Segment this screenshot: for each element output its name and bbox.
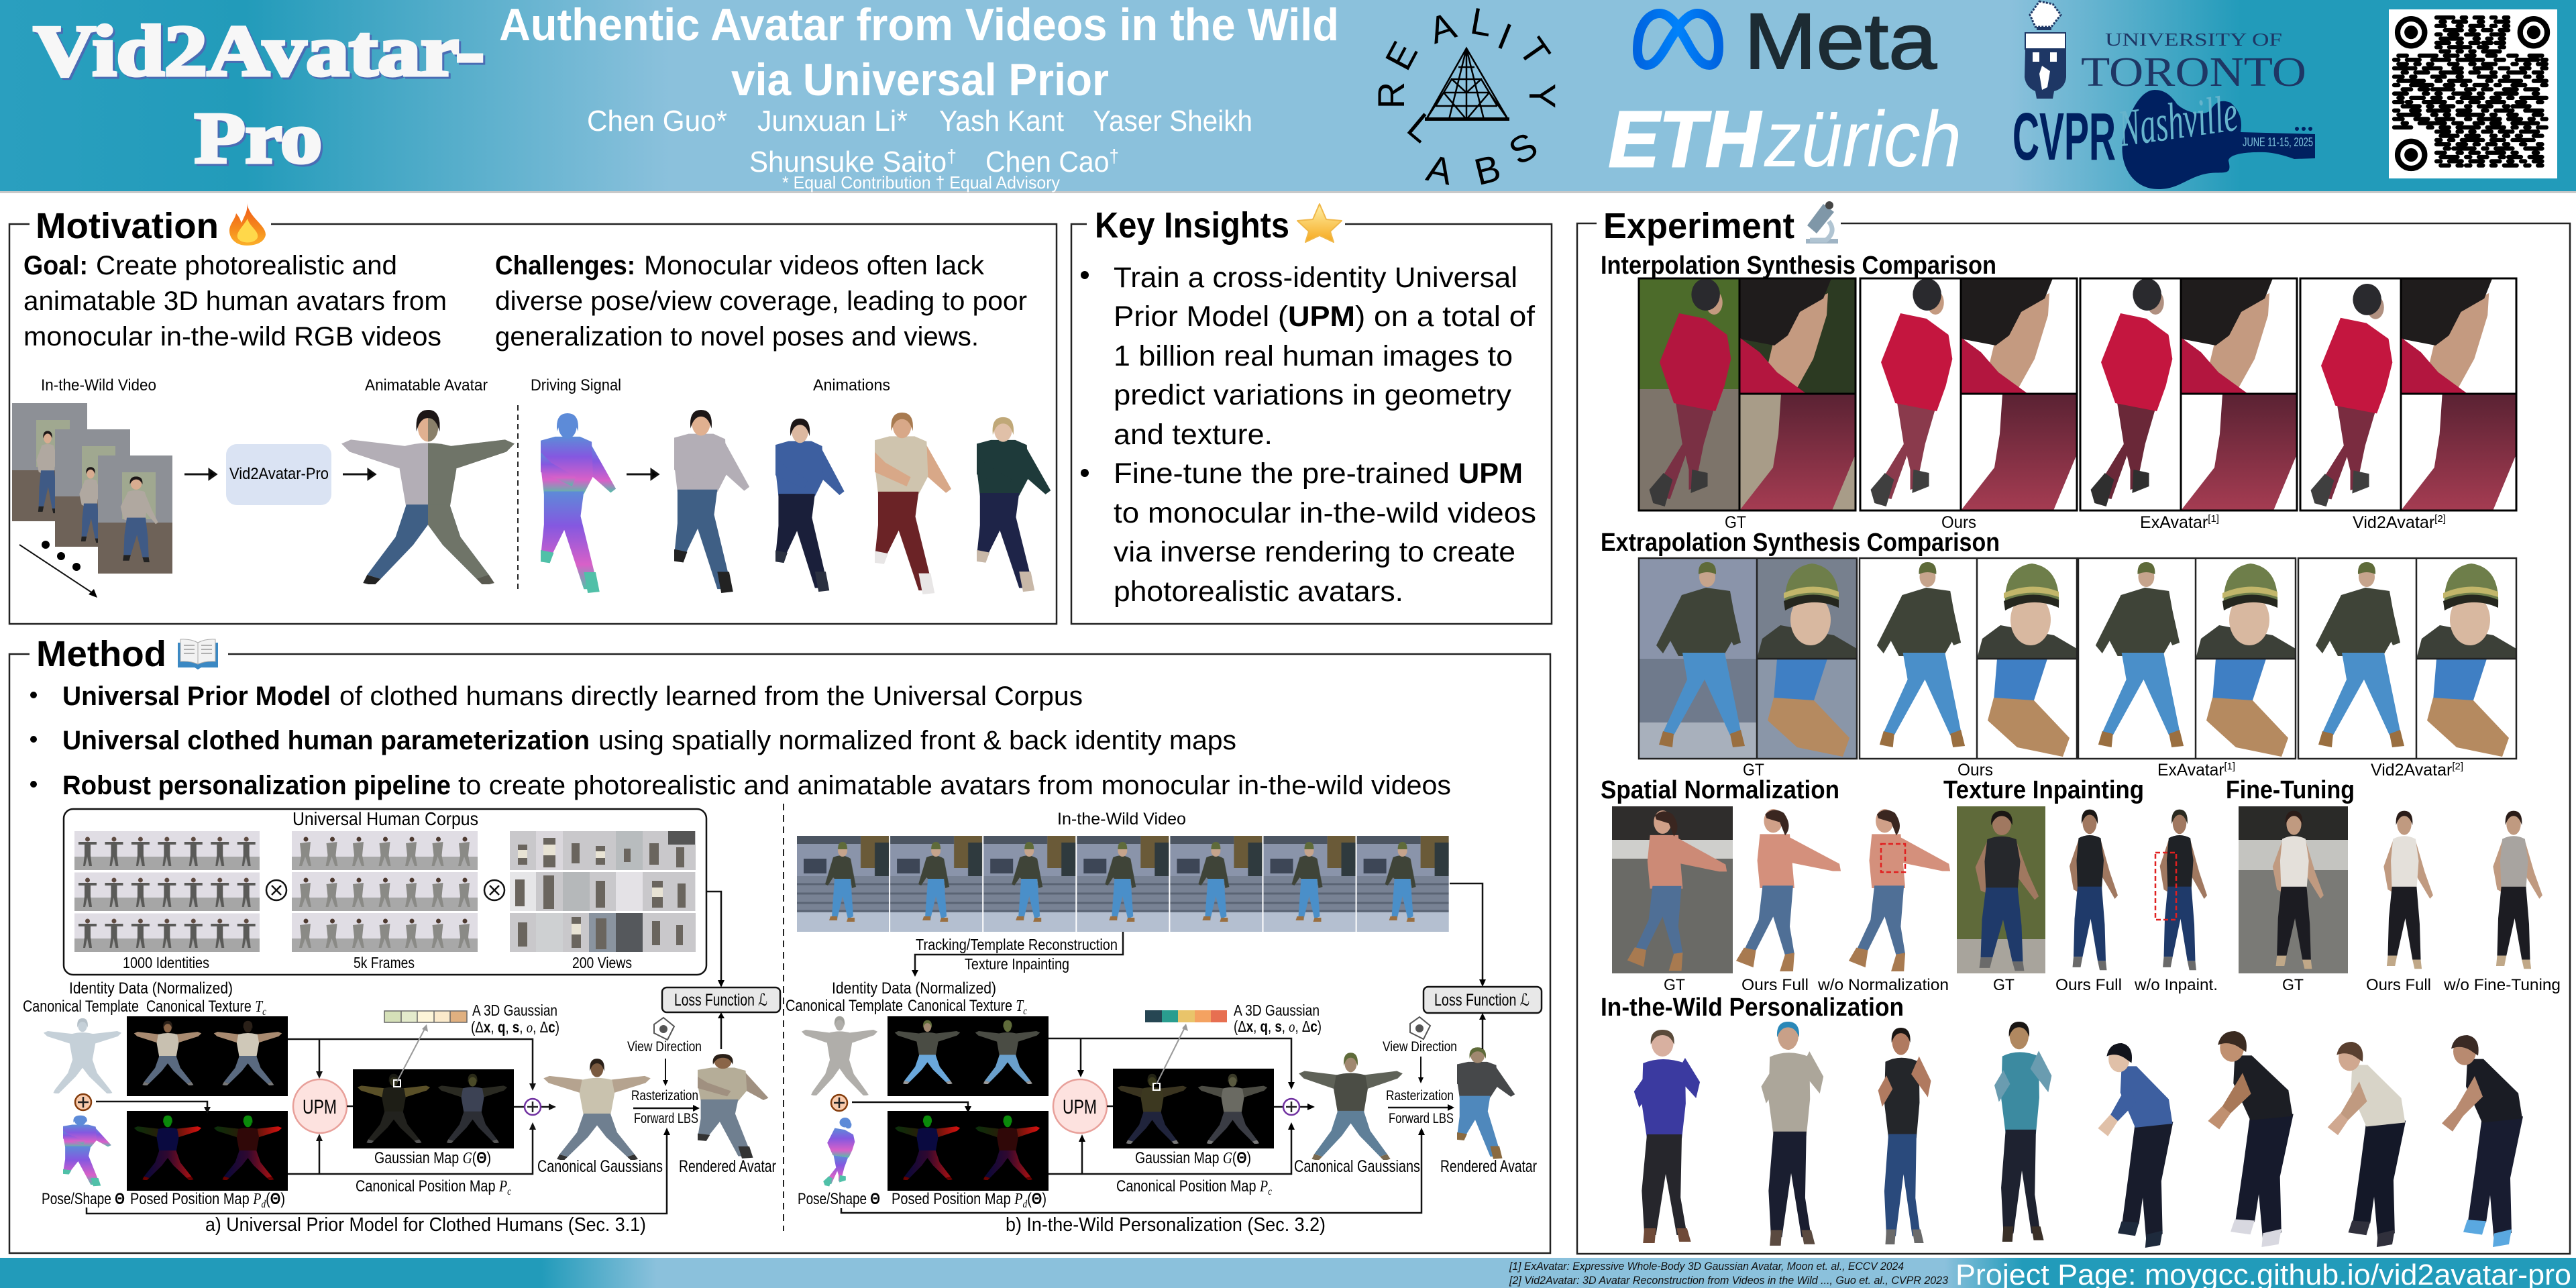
single gaussian attribute bar [384,1002,559,1081]
rendered avatar figure [697,1054,768,1159]
identity data labels: Canonical Template [23,998,139,1016]
logo: Reality Labs [1370,0,1564,193]
extrapolation labels: Vid2Avatar [2371,761,2452,780]
logo: Reality Labs: L [1468,0,1495,45]
logo: Reality Labs: E [1377,35,1426,76]
tracking connector [912,932,1123,977]
UPM node [293,1079,347,1133]
diagram labels [42,1149,776,1210]
extrapolation comparison: Vid2Avatar [2298,558,2516,759]
rendered to loss arrow [1482,1018,1483,1049]
project name: Pro [197,101,324,180]
identity data labels: Canonical Texture T [908,997,1036,1015]
interpolation labels: Vid2Avatar [2353,513,2434,532]
identity data labels: c [262,1006,266,1018]
interpolation comparison: Vid2Avatar [2300,278,2516,511]
logo: Reality Labs: T [1511,30,1559,73]
logo: Reality Labs: B [1470,146,1505,193]
heading: Experiment: Experiment [1603,206,1794,246]
heading: Motivation: Motivation [36,206,219,246]
logo: Reality Labs: R [1370,82,1412,109]
panel: Key Insights [1071,201,1552,624]
rasterization arrow: Forward LBS [1389,1111,1454,1126]
logo: University of Toronto: TORONTO [2081,50,2306,95]
ablation labels: Ours Full [1741,976,1809,994]
subheadings: ablation [1601,776,2355,804]
canonical gaussians figure [1299,1053,1403,1161]
extrapolation labels: Ours [1957,761,1993,780]
captions: Animations [813,376,890,394]
subheading: extrapolation: Extrapolation Synthesis Comparison [1601,529,2000,557]
logo: Reality Labs: A [1424,4,1461,52]
captions [41,376,890,394]
ablation labels: GT [1993,976,2015,994]
logo: CVPR Nashville [2012,83,2315,189]
ablation labels: Ours Full [2366,976,2431,994]
interpolation comparison: ExAvatar [2080,278,2297,511]
tracking connector: Texture Inpainting [965,955,1069,973]
identity data labels [786,979,1027,1017]
box: Vid2Avatar-Pro [226,444,331,505]
animatable avatar figure [341,410,515,586]
subheading: interpolation: Interpolation Synthesis Comparison [1601,252,1996,280]
logo: Reality Labs: L [1399,105,1443,150]
text: challenges: Monocular videos often lack [644,251,985,280]
text: challenges: diverse pose/view coverage, leading to poor [495,286,1027,316]
add icon: orange [831,1095,847,1111]
ablation labels: Ours Full [2055,976,2122,994]
authors: Yash Kant [939,105,1064,138]
icon: open book [178,639,218,669]
bullet list: photorealistic avatars. [1114,576,1403,608]
text: challenges: Challenges: [495,251,635,280]
subheadings: ablation: Texture Inpainting [1943,776,2144,804]
bullet list [1081,262,1536,608]
panel: Method [9,634,1550,1253]
text: challenges [495,251,1027,352]
view direction: View Direction [627,1039,702,1055]
authors: Shunsuke Saito [749,146,956,178]
rasterization arrow: Forward LBS [634,1111,698,1126]
footer banner [0,1258,2576,1288]
single gaussian attribute bar: (Δx, q, s, o, Δc) [1234,1018,1322,1035]
UPM node [1053,1079,1107,1133]
loss function box: Loss Function ℒ [674,991,767,1010]
pose to rasterization connector [841,1128,1425,1213]
single gaussian attribute bar [1145,1002,1322,1084]
canonical template figure [44,1018,121,1094]
canonical texture map [888,1016,1049,1096]
interpolation labels [1725,513,2446,532]
dashed divider [783,804,784,1231]
subheadings: ablation: Spatial Normalization [1601,776,1839,804]
extrapolation labels: [2] [2452,761,2463,772]
method bullets: Universal clothed human parameterization [62,726,590,755]
paper title: via Universal Prior [731,54,1109,105]
text: goal: Goal: [23,251,88,280]
header banner [0,0,2576,193]
add icon: purple [525,1099,541,1115]
bullet list: Prior Model ( [1114,301,1289,333]
authors [587,105,1252,178]
authors: Yaser Sheikh [1093,105,1252,138]
connectors around UPM [204,1039,556,1174]
view direction: View Direction [1383,1039,1457,1055]
icon: fire [229,203,266,246]
diagram labels: c [507,1186,511,1197]
references: [1] ExAvatar: Expressive Whole-Body 3D Gaussian Avatar, Moon et. al., ECCV 2024 [1509,1260,1904,1273]
method bullets: of clothed humans directly learned from the Universal Corpus [339,682,1083,711]
extrapolation comparison: GT [1639,558,1857,759]
in-the-wild avatar figures [1634,1022,2523,1248]
rasterization arrow: Rasterization [631,1088,698,1104]
captions: In-the-Wild Video [41,376,156,394]
arrow [343,470,375,479]
fine-tuning images [2239,806,2542,973]
bullet list: UPM [1288,301,1355,333]
caption a: a) Universal Prior Model for Clothed Humans (Sec. 3.1) [205,1214,646,1236]
universal human corpus box: 1000 Identities [123,954,209,971]
authors: Chen Guo* [587,105,727,138]
captions: Animatable Avatar [365,376,488,394]
caption b: b) In-the-Wild Personalization (Sec. 3.2) [1006,1214,1326,1236]
icon: star [1297,204,1342,242]
loss function box [662,980,780,1012]
pose shape figure [62,1116,111,1186]
universal human corpus box: 200 Views [572,954,632,971]
logo: University of Toronto: UNIVERSITY OF [2105,30,2282,50]
panel: Motivation [9,201,1057,624]
posed position map [127,1111,288,1191]
diagram labels: Canonical Gaussians [1294,1157,1420,1176]
rasterization arrow: Rasterization [1386,1088,1454,1104]
gaussian map [353,1069,514,1148]
in-the-wild video frames [12,403,172,598]
diagram labels: Canonical Position Map P [1116,1177,1285,1195]
video strip [797,810,1450,932]
subheadings: ablation: Fine-Tuning [2226,776,2355,804]
references [1509,1260,1948,1287]
logo: ETH Zurich: zürich [1764,95,1962,184]
extrapolation comparison: Ours [1860,558,2077,759]
UPM node: UPM [1063,1096,1097,1118]
text: goal: Create photorealistic and [96,251,397,280]
diagram labels: d [261,1199,266,1210]
interpolation labels: GT [1725,513,1746,532]
diagram labels: Canonical Position Map P [356,1177,525,1195]
ablation labels [1664,976,2561,994]
project name [34,11,486,180]
text: goal: monocular in-the-wild RGB videos [23,322,441,352]
driving signal figure [540,413,616,593]
diagram labels: Θ) [270,1190,286,1208]
bullet list: Train a cross-identity Universal [1114,262,1517,294]
tracking connector: Tracking/Template Reconstruction [916,936,1118,953]
diagram labels: Θ) [1032,1190,1047,1208]
pose shape figure [823,1118,855,1186]
project name: Vid2Avatar- [36,13,486,93]
gaussian map [1113,1069,1274,1148]
QR code [2389,9,2557,178]
diagram labels: Rendered Avatar [1440,1157,1537,1176]
loss function box [1424,979,1542,1013]
logo: Reality Labs: Y [1521,83,1564,109]
method bullets: to create photorealistic and animatable avatars from monocular in-the-wild videos [458,771,1451,800]
interpolation labels: ExAvatar [2140,513,2208,532]
logo: CVPR Nashville: JUNE 11-15, 2025 [2243,136,2313,149]
interpolation comparison: Ours [1860,278,2077,511]
identity data labels: Canonical Texture T [146,998,275,1016]
universal human corpus box [64,808,706,975]
diagram labels: d [1022,1199,1028,1210]
single gaussian attribute bar: (Δx, q, s, o, Δc) [471,1018,559,1036]
diagram labels: Pose/Shape Θ [798,1190,880,1208]
diagram a: universal prior model [23,808,780,1236]
method bullets: Robust personalization pipeline [62,771,451,800]
panel: Experiment [1577,201,2570,1254]
diagram labels: Pose/Shape Θ [42,1190,125,1208]
ablation labels: GT [2282,976,2304,994]
text: challenges: generalization to novel poses and views. [495,322,979,352]
diagram labels: Posed Position Map P [892,1190,1034,1208]
video strip: In-the-Wild Video [1057,810,1186,828]
references: [2] Vid2Avatar: 3D Avatar Reconstruction from Videos in the Wild ..., Guo et. al., CVPR 2023 [1509,1274,1948,1287]
bullet list: via inverse rendering to create [1114,536,1515,568]
interpolation labels: [1] [2208,513,2219,525]
extrapolation labels [1743,761,2463,780]
single gaussian attribute bar: A 3D Gaussian [472,1002,557,1019]
extrapolation labels: [1] [2224,761,2235,772]
arrow [627,470,658,479]
ablation labels: GT [1664,976,1685,994]
dashed separator [517,405,519,590]
identity data labels: Canonical Template [786,997,903,1015]
authors: † [947,146,957,166]
diagram labels: ( [1027,1190,1032,1208]
identity data labels [23,979,266,1018]
connector: identity to posed map [852,1102,968,1108]
texture inpainting images [1957,806,2207,973]
paper title: Authentic Avatar from Videos in the Wild [499,0,1339,50]
diagram b: in-the-wild personalization [786,810,1542,1236]
method bullets [30,682,1451,800]
canonical template figure [802,1016,877,1096]
bullet list: predict variations in geometry [1114,379,1512,411]
posed position map [888,1111,1049,1191]
logo: ETH Zurich [1609,95,1962,184]
ablation labels: w/o Fine-Tuning [2443,976,2561,994]
bullet list: Fine-tune the pre-trained [1114,458,1450,490]
canonical texture map [127,1016,288,1096]
subheading: in-the-wild personalization: In-the-Wild Personalization [1601,994,1904,1022]
diagram labels: Rendered Avatar [679,1157,776,1176]
heading: Method: Method [36,634,166,674]
diagram labels: Canonical Gaussians [537,1157,663,1176]
extrapolation labels: ExAvatar [2157,761,2225,780]
logo: ETH Zurich: ETH [1609,95,1762,184]
diagram labels: Gaussian Map G(Θ) [374,1149,491,1167]
extrapolation labels: GT [1743,761,1764,780]
logo: Reality Labs: S [1501,123,1544,173]
connector: identity to posed map [96,1102,207,1108]
identity data labels: Identity Data (Normalized) [69,979,233,998]
logo: Reality Labs: A [1423,146,1457,193]
logo: CVPR Nashville: CVPR [2012,99,2116,174]
authors: Junxuan Li* [757,105,908,138]
project name: Pro [195,99,322,178]
logo: University of Toronto [2025,1,2306,99]
ablation labels: w/o Normalization [1817,976,1949,994]
logo: CVPR Nashville: Nashville [2114,83,2241,158]
logo: Reality Labs: I [1492,15,1517,58]
universal human corpus box: 5k Frames [354,954,415,971]
diagram labels: Posed Position Map P [130,1190,273,1208]
arrow [184,470,216,479]
logo: Meta [1638,0,1937,86]
view direction [1383,1017,1457,1083]
authors: † [1109,146,1119,166]
bullet list: and texture. [1114,419,1273,451]
interpolation labels: Ours [1941,513,1976,532]
bullet list: UPM [1458,458,1523,490]
connectors around UPM [965,1038,1315,1174]
method bullets: using spatially normalized front & back identity maps [598,726,1236,755]
diagram labels [798,1149,1537,1210]
diagram labels: Gaussian Map G(Θ) [1135,1149,1251,1167]
contribution note: * Equal Contribution † Equal Advisory [782,172,1060,193]
ablation labels: w/o Inpaint. [2134,976,2218,994]
view direction [627,1018,702,1086]
identity data labels: Identity Data (Normalized) [832,979,996,998]
box: Vid2Avatar-Pro: Vid2Avatar-Pro [229,465,329,483]
rasterization arrow [631,1088,700,1126]
text: goal: animatable 3D human avatars from [23,286,447,316]
UPM node: UPM [303,1096,337,1118]
extrapolation comparison: ExAvatar [2078,558,2296,759]
rendered avatar figure [1456,1047,1515,1159]
bullet list: ) on a total of [1355,301,1536,333]
interpolation comparison: GT [1639,278,1856,511]
add icon: purple [1283,1099,1299,1115]
rasterization arrow [1386,1088,1454,1126]
strip to loss connector [1450,883,1483,981]
loss function box: Loss Function ℒ [1434,991,1529,1010]
heading: Key Insights: Key Insights [1095,205,1289,246]
paper title [499,0,1339,105]
interpolation labels: [2] [2434,513,2446,525]
diagram labels: ( [266,1190,270,1208]
icon: microscope [1806,201,1838,244]
bullet list: 1 billion real human images to [1114,340,1513,372]
canonical gaussians figure [543,1059,651,1161]
corpus to loss connector [706,892,721,981]
pose to rasterization connector [87,1128,670,1214]
captions: Driving Signal [531,376,621,394]
animation figures [674,410,1051,594]
spatial normalization images [1612,806,1950,973]
authors: Chen Cao [985,146,1118,178]
bullet list: to monocular in-the-wild videos [1114,497,1536,529]
rendered to loss arrow [720,1017,722,1049]
text: goal [23,251,447,352]
project name: Vid2Avatar- [34,11,484,91]
method bullets: Universal Prior Model [62,682,331,711]
diagram labels: c [1268,1186,1272,1197]
universal human corpus box: Universal Human Corpus [292,808,478,829]
single gaussian attribute bar: A 3D Gaussian [1234,1002,1320,1019]
identity data labels: c [1023,1006,1027,1017]
add icon: orange [75,1094,91,1110]
